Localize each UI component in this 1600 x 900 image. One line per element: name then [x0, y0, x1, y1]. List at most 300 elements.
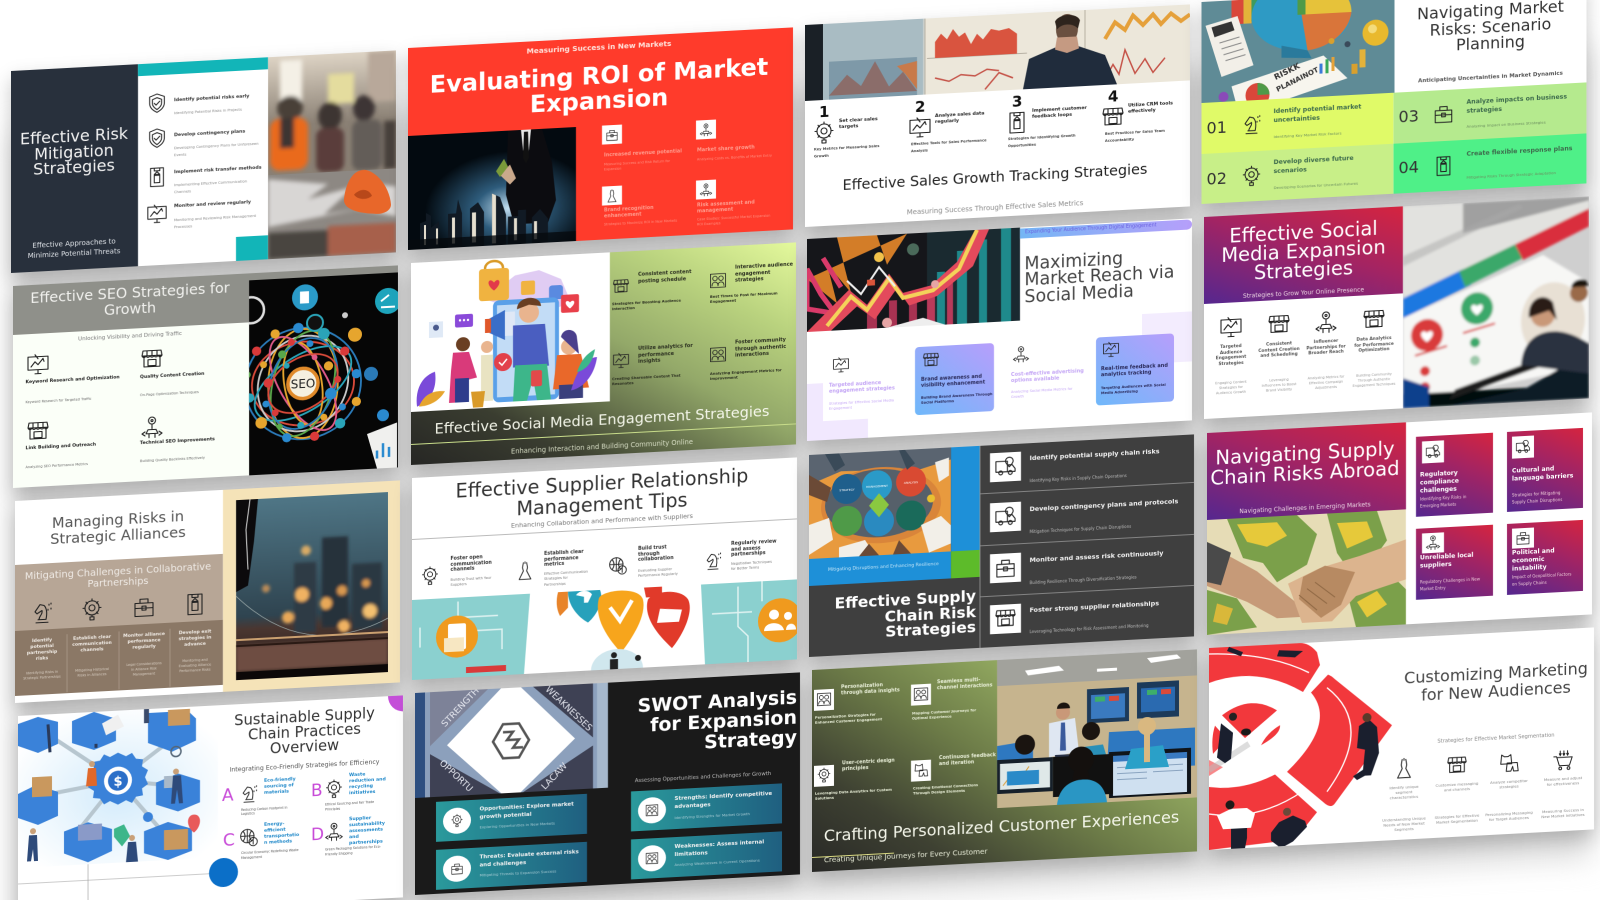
icon: risk assessment [696, 180, 716, 200]
tan band [15, 554, 223, 631]
item title: advantages [674, 802, 711, 810]
item title [939, 753, 996, 769]
icon: response plan [1436, 156, 1451, 176]
item subtitle [913, 783, 978, 797]
item title: characteristics [1390, 794, 1418, 801]
eyebrow: Measuring Success in New Markets [527, 39, 671, 56]
item subtitle: Creating Emotional Connections [913, 783, 978, 791]
item title: economic [1512, 556, 1545, 565]
item title: growth potential [480, 812, 532, 821]
photo label: PLANAINOT [1275, 66, 1320, 94]
item subtitle: Case Studies: Successful Market Expansion [697, 214, 770, 222]
item subtitle: ROI Examples [697, 221, 721, 227]
item subtitle: Negotiation Techniques [731, 560, 772, 566]
item title: insights [638, 358, 660, 365]
card 4 [1096, 333, 1174, 406]
item subtitle [174, 214, 256, 229]
band text: Mitigating Disruptions and Enhancing Resilience [828, 562, 939, 573]
item title: Monitor alliance [123, 632, 165, 639]
item title: Analyze sales data [935, 111, 984, 119]
icon: pin [324, 822, 344, 843]
item title [544, 550, 584, 569]
item title [349, 815, 385, 848]
item subtitle: Expansion [604, 167, 621, 172]
icon: truck [1512, 436, 1534, 459]
item subtitle: Creating Shareable Content That [612, 374, 681, 381]
subtitle: Strategies for Effective Market Segmentation [1437, 732, 1555, 744]
item title: Data Analytics [1356, 336, 1392, 343]
icon: briefcase [602, 125, 622, 145]
title: Planning [1456, 32, 1525, 54]
item title: Opportunities: Explore market [480, 802, 574, 813]
icon: gear [814, 765, 834, 787]
slide: Effective Supply Chain Risk Strategies [809, 434, 1194, 657]
item subtitle: Ethical Sourcing and Fair Trade [325, 800, 374, 807]
icon: shop [922, 351, 940, 370]
item subtitle: New Market Initiatives [1541, 812, 1585, 819]
item title [697, 199, 755, 214]
item subtitle: Events [174, 152, 186, 157]
decorative magenta circle [388, 678, 420, 712]
item title: channels [80, 647, 104, 653]
icon: analytics [612, 351, 630, 370]
item title [735, 262, 793, 284]
title: Effective Social [1229, 217, 1378, 248]
title: Strategies [1254, 256, 1353, 284]
item title: and [349, 835, 359, 841]
title: Overview [270, 737, 339, 757]
icon: chess knight [1244, 114, 1260, 135]
title: Customizing Marketing [1404, 659, 1588, 688]
item subtitle: Monitoring and [182, 658, 208, 663]
item subtitle: Performance Regularly [638, 572, 678, 578]
icon: team [515, 560, 535, 581]
subtitle: Integrating Eco-Friendly Strategies for Efficiency [230, 759, 379, 774]
item title: and iteration [939, 761, 974, 768]
item title: Audience [1220, 350, 1242, 356]
title: for New Audiences [1421, 677, 1571, 704]
icon: monitor chart [832, 356, 850, 375]
item subtitle: Logistics [241, 811, 255, 816]
icon: exit strategy [183, 592, 207, 617]
item subtitle: Best Times to Post for Maximum [710, 291, 778, 299]
slide: Sustainable Supply Chain Practices Overview [18, 695, 403, 900]
item subtitle: Optimal Experience [912, 715, 952, 721]
icon: market share [696, 120, 716, 140]
item title: potential [30, 644, 54, 650]
letter D: D [311, 825, 324, 845]
title: Social Media [1024, 282, 1134, 307]
title [1221, 218, 1386, 284]
item subtitle: Growth [1011, 394, 1024, 399]
item title: effectively [1128, 108, 1156, 115]
letter C: C [223, 830, 235, 851]
slide: Maximizing Market Reach via Social Media [807, 218, 1192, 441]
item title: sourcing of [264, 783, 294, 790]
item title: and assess [731, 546, 761, 553]
item title [27, 638, 57, 663]
item subtitle: Mitigating Historical [75, 667, 109, 673]
item title [921, 373, 985, 389]
item subtitle: Influencers to Boost [1261, 382, 1297, 387]
item subtitle: Management [241, 855, 262, 860]
item subtitle [710, 368, 782, 382]
eyebrow text: Expanding Your Audience Through Digital Engagement [1025, 223, 1157, 235]
item title: Cultural and [1512, 465, 1554, 475]
item title: Analyze competitor [1490, 778, 1528, 785]
slide: Effective Social Media Expansion Strategies [1204, 196, 1589, 419]
icon: shop monitor [26, 419, 50, 444]
slide: Navigating Market Risks: Scenario Planning [1202, 0, 1586, 204]
title [30, 280, 230, 319]
icon: chess knight [703, 550, 723, 571]
item subtitle: Identifying Key Market Risk Factors [1274, 131, 1342, 139]
icon: shield [148, 93, 166, 114]
icon: truck with pin [990, 452, 1021, 482]
item title [1512, 547, 1555, 573]
item subtitle: Strategies for [544, 576, 568, 581]
item title: Build trust [638, 545, 667, 552]
item subtitle: Effective Communication [544, 570, 588, 576]
item title: Develop contingency plans and protocols [1030, 497, 1178, 513]
item subtitle: Strategies for [1219, 384, 1243, 390]
item title: efficient [264, 828, 286, 834]
item subtitle: Leveraging Technology for Risk Assessment and Monitoring [1030, 622, 1149, 634]
item subtitle: Engaging Content [1215, 379, 1247, 385]
item title [1216, 344, 1246, 368]
slide: Effective Supplier Relationship Management Tips [412, 457, 797, 680]
item title: Regularly review [731, 539, 777, 547]
item title: Establish clear [73, 635, 111, 642]
card: political instability [1507, 520, 1583, 595]
item subtitle: Effective Tools for Sales Performance [911, 138, 987, 146]
item title: Partnerships for [1306, 344, 1346, 351]
icon: briefcase [1512, 528, 1534, 549]
item title: n methods [264, 840, 292, 846]
step number 4: 4 [1108, 87, 1118, 106]
item title: Customize messaging [1436, 781, 1478, 788]
blue band [809, 551, 951, 586]
item title [450, 555, 492, 574]
item subtitle: Building Resilience Through Diversification Strategies [1030, 574, 1137, 585]
item subtitle [1420, 494, 1466, 510]
item subtitle: Leveraging Data Analytics for Custom [815, 788, 892, 796]
title: Expansion [530, 83, 668, 118]
item title [604, 205, 654, 219]
photo: risk planning desk with pie chart [1202, 0, 1395, 103]
card: regulatory compliance [1416, 433, 1493, 517]
title [1024, 248, 1174, 306]
photo: workshop room with orange object on foil [268, 50, 396, 260]
graphic: red target with business people [1209, 643, 1392, 850]
item subtitle [829, 398, 894, 411]
item subtitle: Reducing Carbon Footprint in [241, 805, 288, 812]
title: Strategies [885, 618, 976, 641]
divider line [411, 423, 796, 445]
item title: strategies [735, 276, 764, 284]
item subtitle [325, 845, 381, 857]
item title: management [697, 206, 733, 214]
item title: for effectiveness [1547, 780, 1579, 787]
item subtitle [1308, 374, 1344, 391]
gear symbol: $ [113, 774, 123, 790]
item title [731, 539, 777, 559]
subtitle: Navigating Challenges in Emerging Markets [1239, 501, 1371, 515]
item title [1274, 155, 1354, 175]
item subtitle: Management [133, 672, 155, 677]
icon: machine [1009, 112, 1025, 134]
item subtitle [450, 576, 491, 589]
item title: Identify potential risks early [174, 94, 249, 103]
item title: Continuous feedback [939, 753, 996, 761]
number 04: 04 [1398, 157, 1419, 177]
item subtitle [126, 661, 162, 678]
item subtitle: for Better Terms [731, 566, 759, 571]
item subtitle: Building Community [1356, 371, 1392, 377]
card: strengths [631, 783, 782, 831]
divider [412, 518, 797, 540]
item title: Energy- [264, 822, 284, 828]
item title: strategies [1499, 784, 1519, 790]
item subtitle [814, 144, 880, 158]
item title: performance [638, 351, 674, 358]
item title: Identify [32, 638, 52, 644]
title: Chain Practices [248, 720, 361, 743]
block 04 [1394, 133, 1586, 194]
item subtitle [241, 848, 299, 860]
item subtitle [910, 138, 987, 153]
title: Evaluating ROI of Market [430, 53, 768, 99]
item title [674, 838, 764, 859]
item title [264, 821, 299, 847]
item title: options available [1011, 376, 1059, 384]
item title [72, 635, 112, 655]
item title: for Performance [1354, 341, 1394, 349]
title: Mitigation [34, 140, 114, 163]
item title: regularly [935, 119, 959, 125]
item title: Monitor and review regularly [174, 200, 251, 209]
column dividers [15, 620, 223, 696]
item subtitle: Identifying Potential Risks in Projects [174, 108, 242, 115]
item subtitle [1353, 371, 1395, 389]
item title: sustainability [349, 821, 385, 828]
item subtitle: Engagement Techniques [1353, 381, 1395, 388]
card: cultural barriers [1507, 428, 1583, 512]
icon: monitor chart [26, 352, 50, 377]
item title [638, 269, 692, 285]
item title: channel interactions [937, 684, 992, 692]
item title: limitations [674, 850, 708, 858]
icon: shop [1102, 108, 1124, 126]
item title: and challenges [480, 860, 526, 869]
item title: performance [127, 638, 161, 645]
item subtitle: Improvement [710, 376, 738, 381]
green square [951, 550, 980, 578]
item subtitle: Analyzing Costs vs. Benefits of Market Entry [697, 154, 772, 162]
item title: Cost-effective advertising [1011, 368, 1084, 378]
title: Effective Sales Growth Tracking Strategies [843, 162, 1147, 194]
item subtitle: Social Platforms [921, 399, 954, 404]
block 03 [1394, 82, 1586, 144]
item title [838, 116, 878, 130]
item title: Brand recognition [604, 205, 654, 214]
item subtitle [1101, 382, 1166, 396]
item title: partnerships [349, 840, 383, 847]
title: Chain Risk [885, 603, 976, 626]
teal accent block bottom [236, 235, 268, 261]
item title [841, 682, 900, 698]
item title: risks [36, 656, 48, 662]
icon: briefcase [443, 855, 471, 883]
item subtitle: Strategies for Effective Social Media [829, 398, 894, 405]
item title: Identify potential market [1274, 103, 1361, 115]
item subtitle [1215, 379, 1247, 396]
item title: and Scheduling [1260, 352, 1298, 359]
item title [1354, 336, 1394, 355]
icon: shop [990, 604, 1021, 634]
item title [480, 801, 574, 822]
item subtitle [912, 708, 976, 722]
item subtitle: Strategies for Boosting Audience [612, 298, 681, 306]
icon: globe and coin [239, 827, 259, 848]
item title: transportatio [264, 833, 299, 840]
icon: gear [1242, 165, 1260, 186]
item title: Seamless multi- [937, 678, 980, 685]
icon: people [709, 345, 727, 364]
item title [1101, 363, 1168, 379]
card: weaknesses [631, 831, 782, 879]
illustration: social media team with phone [411, 252, 610, 412]
item subtitle [1261, 377, 1297, 393]
item subtitle: Media Advertising [1101, 389, 1138, 395]
item subtitle: Needs of New Market [1383, 821, 1425, 828]
item subtitle: Measuring Success in [1542, 807, 1584, 814]
subtitle: Minimize Potential Threats [28, 247, 120, 260]
item subtitle: for Target Audiences [1489, 815, 1529, 822]
item title: Create flexible response plans [1466, 145, 1572, 158]
subtitle: Anticipating Uncertainties in Market Dynamics [1418, 71, 1563, 84]
item title: Develop diverse future [1274, 155, 1354, 166]
item title: Threats: Evaluate external risks [480, 849, 579, 861]
item subtitle [1485, 810, 1533, 823]
item subtitle: Through Authentic [1358, 377, 1390, 382]
item title: feedback loops [1032, 113, 1072, 120]
item title: assessments [349, 828, 383, 834]
band heading: Mitigating Challenges in Collaborative [25, 562, 211, 582]
item title: Eco-friendly [264, 777, 296, 784]
band heading: Partnerships [88, 576, 148, 590]
item title: Optimization [1358, 347, 1390, 354]
icon: people [638, 797, 666, 824]
letter A: A [222, 785, 234, 806]
slide: Customizing Marketing for New Audiences [1209, 627, 1594, 850]
item title: Weaknesses: Assess internal [674, 839, 764, 850]
icon: collaboration [608, 555, 628, 577]
item title [1512, 464, 1573, 483]
item title: Measure and adjust [1544, 775, 1582, 782]
item subtitle: Principles [325, 806, 340, 811]
item title: through data insights [841, 689, 900, 697]
item subtitle: Partnerships [544, 582, 566, 587]
title: Market Reach via [1024, 263, 1174, 291]
item title: Utilize analytics for [638, 343, 693, 352]
icon: gear [80, 597, 104, 623]
item subtitle: Key Metrics for Measuring Sales [814, 144, 879, 152]
item title: segment [1395, 789, 1413, 795]
item subtitle [1104, 129, 1165, 142]
item title [1420, 552, 1474, 570]
item subtitle: Implementing Effective Communication [174, 179, 247, 187]
item subtitle: Developing Scenarios for Uncertain Futures [1274, 181, 1358, 190]
item title [1490, 778, 1528, 790]
item subtitle: Analyzing Impact on Business Strategies [1466, 120, 1546, 129]
item subtitle: Identifying Risks in [26, 670, 58, 675]
item title: Foster strong supplier relationships [1030, 599, 1159, 614]
item title: Set clear sales [839, 117, 878, 124]
card: unreliable suppliers [1416, 525, 1493, 600]
item title: recycling [349, 784, 373, 790]
item subtitle: Growth [814, 153, 829, 158]
item title [829, 379, 895, 395]
title [1210, 439, 1400, 488]
item title: Consistent content [638, 269, 692, 278]
item subtitle [921, 392, 992, 405]
item subtitle: Exploring Opportunities in New Markets [480, 821, 555, 830]
item title: Link Building and Outreach [26, 443, 96, 451]
item title [842, 759, 895, 774]
item subtitle: Suppliers [450, 582, 467, 587]
item title [179, 629, 211, 649]
item subtitle: Performance Risks [179, 668, 211, 673]
item subtitle: Building Quality Backlinks Effectively [140, 456, 205, 463]
title: Strategic Alliances [50, 524, 186, 548]
item title: posting schedule [638, 276, 686, 284]
icon: people [911, 684, 931, 706]
item subtitle: Building Brand Awareness Through [921, 392, 992, 399]
item title: Consistent [1266, 341, 1292, 348]
icon: dress [1393, 757, 1415, 780]
item subtitle: Building Trust with Your [450, 576, 491, 582]
item title: Identify potential supply chain risks [1030, 447, 1160, 462]
item title: engagement [735, 269, 770, 277]
item title: Content Creation [1258, 346, 1300, 354]
item title: Influencer [1314, 339, 1338, 345]
item subtitle: Friendly Shipping [325, 851, 352, 856]
item title: regularly [132, 644, 156, 651]
slide: Crafting Personalized Customer Experiences [812, 649, 1197, 872]
item subtitle: Engagement [710, 299, 736, 304]
item subtitle: Legal Considerations [126, 661, 162, 667]
photo: SEO network globe [249, 272, 398, 475]
item subtitle [1011, 386, 1073, 400]
icon: clothes [1498, 751, 1520, 775]
title: Effective Supply [835, 587, 976, 613]
icon: briefcase [132, 594, 156, 620]
letter B: B [311, 781, 323, 801]
item subtitle [174, 142, 259, 157]
photo: contact centre training room [997, 649, 1197, 808]
item title: materials [264, 790, 289, 796]
item title: engagement strategies [829, 386, 895, 395]
title: Navigating Supply [1215, 437, 1395, 470]
icon: people [638, 845, 666, 872]
item title [638, 343, 693, 366]
slide: Evaluating ROI of Market Expansion [408, 27, 793, 250]
item subtitle: Evaluating Supplier [638, 567, 672, 573]
photo: blurred social media metrics dashboard [1403, 196, 1589, 408]
item title: Real-time feedback and [1101, 363, 1168, 372]
item subtitle: Through Design Elements [913, 789, 965, 796]
